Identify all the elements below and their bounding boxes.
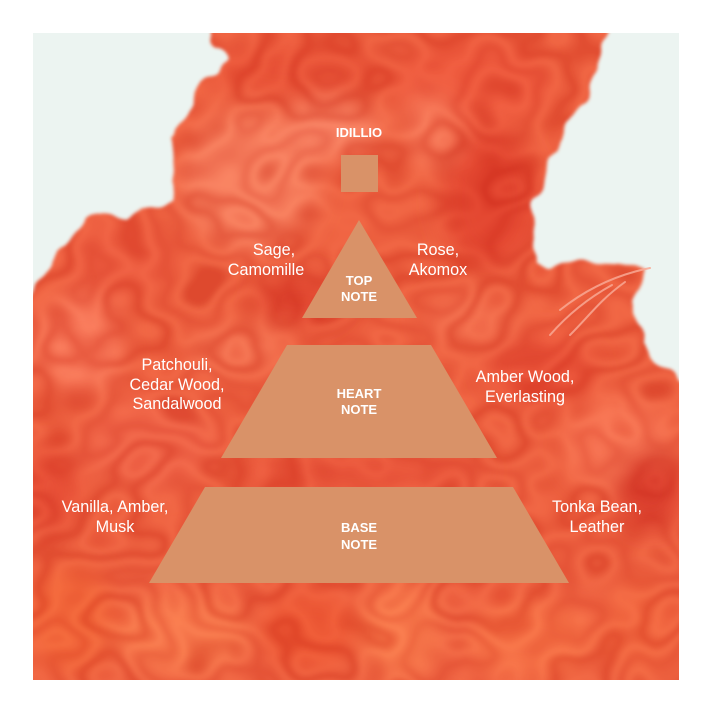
top note ingredients left: Sage, xyxy=(253,241,295,259)
pyramid tier: heart note xyxy=(221,345,497,458)
heart note ingredients left: Cedar Wood, xyxy=(129,376,225,394)
top note ingredients left: Camomille xyxy=(228,261,304,279)
heart note ingredients right: Everlasting xyxy=(485,388,565,406)
pyramid tier: base note xyxy=(149,487,569,583)
product name: IDILLIO xyxy=(336,125,382,140)
heart note ingredients left: Patchouli, xyxy=(141,356,213,374)
heart note ingredients right: Amber Wood, xyxy=(476,368,574,386)
top note ingredients right: Akomox xyxy=(409,261,467,279)
pyramid tier: base note: BASE xyxy=(341,520,377,535)
base note ingredients right: Leather xyxy=(570,518,625,536)
base note ingredients left: Vanilla, Amber, xyxy=(62,498,168,516)
pyramid tier: top note xyxy=(302,220,417,318)
pyramid tier: base note: NOTE xyxy=(341,537,377,552)
top note ingredients right: Rose, xyxy=(417,241,459,259)
pyramid tier: heart note: HEART xyxy=(337,386,381,401)
icon: perfume bottle cap square xyxy=(341,155,378,192)
pyramid tier: heart note: NOTE xyxy=(341,402,377,417)
wispy strands right xyxy=(550,268,650,335)
pyramid tier: top note: TOP xyxy=(346,273,373,288)
base note ingredients left: Musk xyxy=(96,518,135,536)
heart note ingredients left: Sandalwood xyxy=(132,395,222,413)
base note ingredients right: Tonka Bean, xyxy=(552,498,642,516)
pyramid tier: top note: NOTE xyxy=(341,289,377,304)
